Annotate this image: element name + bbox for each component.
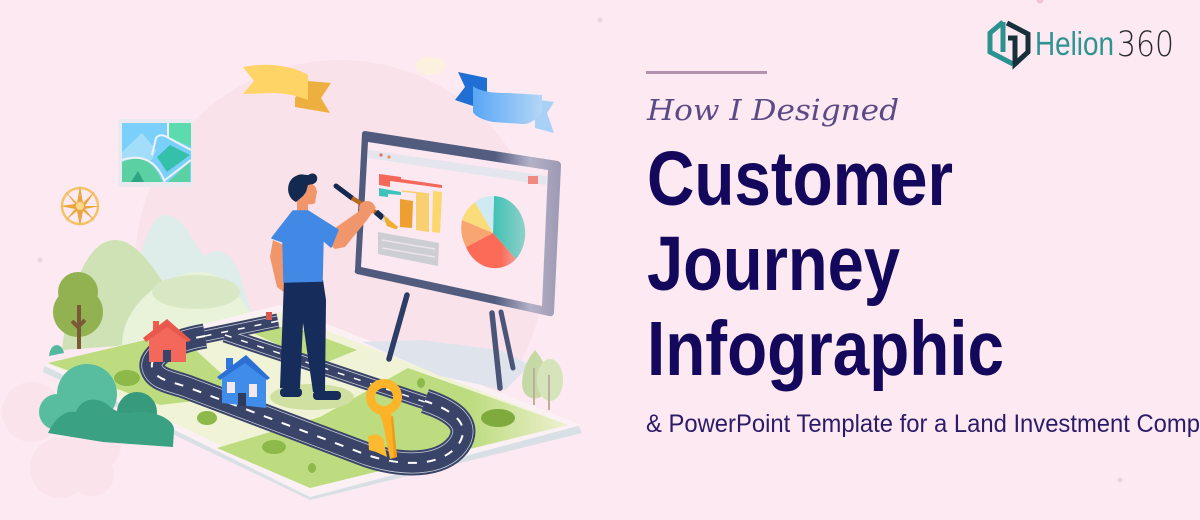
ribbon: yellow xyxy=(243,65,331,113)
ribbon: blue xyxy=(455,72,554,133)
shoes xyxy=(280,388,341,400)
hand xyxy=(359,201,375,215)
tree xyxy=(53,272,103,349)
logo number: 360 xyxy=(1117,25,1174,65)
text block on board xyxy=(378,232,439,266)
pink clouds bottom left xyxy=(2,382,121,498)
small pale trees xyxy=(522,350,563,410)
title line 3: Infographic xyxy=(647,306,1004,392)
big green bush xyxy=(39,364,174,447)
icon: compass xyxy=(60,186,100,226)
key xyxy=(368,384,398,459)
left arm xyxy=(270,240,288,293)
hills xyxy=(62,215,262,350)
icon: map picture xyxy=(118,119,193,187)
trousers xyxy=(280,280,326,392)
logo xyxy=(990,22,1174,65)
person foot shadow xyxy=(270,384,354,410)
pale cloud xyxy=(415,57,445,75)
road xyxy=(152,321,463,463)
easel legs xyxy=(389,295,513,388)
person xyxy=(270,173,397,400)
browser bar xyxy=(368,150,547,185)
house: red xyxy=(143,319,191,362)
neck and face xyxy=(297,182,317,213)
map base xyxy=(43,305,582,500)
logo mark xyxy=(990,22,1028,64)
subtitle: how i designed: How I Designed xyxy=(646,93,899,127)
pie chart xyxy=(461,196,525,268)
logo name: Helion xyxy=(1035,25,1114,62)
fields xyxy=(48,325,568,488)
road sign xyxy=(266,312,272,320)
right arm xyxy=(330,202,376,249)
heading rule xyxy=(646,71,767,74)
paintbrush xyxy=(336,186,397,228)
small teal bush xyxy=(49,345,64,356)
title line 1: Customer xyxy=(647,136,953,222)
small bushes xyxy=(114,370,515,473)
board shadow xyxy=(362,340,530,390)
presentation board xyxy=(355,131,561,316)
shirt xyxy=(272,211,338,282)
hair xyxy=(288,173,317,202)
house: blue xyxy=(217,355,270,408)
bar chart xyxy=(379,174,442,233)
pale backdrop circle xyxy=(135,60,545,470)
title line 2: Journey xyxy=(647,221,900,307)
